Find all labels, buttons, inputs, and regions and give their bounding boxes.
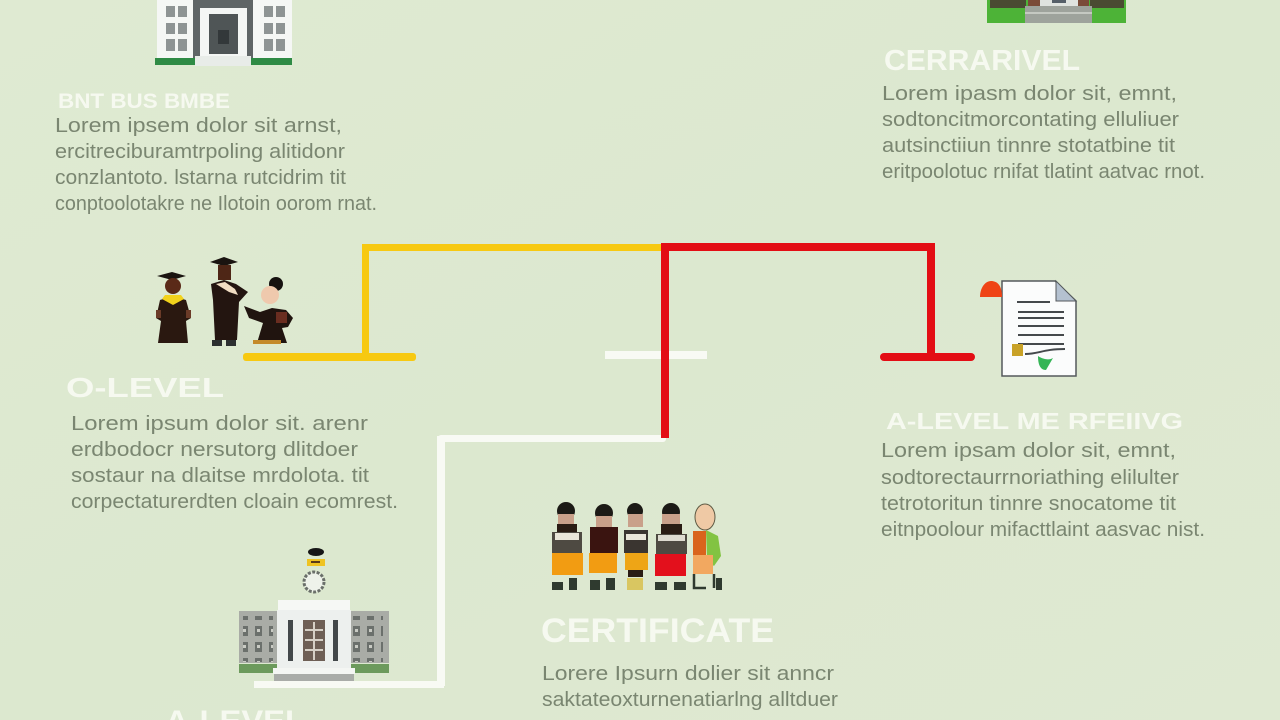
text block: certificate: Lorere Ipsurn dolier sit anncr bbox=[542, 663, 834, 685]
connector: yellow path bbox=[243, 244, 664, 361]
text block: top left: Lorem ipsem dolor sit arnst, bbox=[55, 115, 342, 137]
text block: top left: conptoolotakre ne Ilotoin oorom rnat. bbox=[55, 193, 377, 215]
student four bbox=[655, 503, 687, 590]
student two bbox=[589, 504, 618, 590]
text block: O-level: sostaur na dlaitse mrdolota. tit bbox=[71, 465, 369, 487]
icon: graduates bbox=[156, 257, 293, 346]
graduate three bbox=[244, 277, 293, 344]
student one bbox=[552, 502, 583, 590]
text block: A-level bbox=[881, 440, 1205, 541]
text block: A-level: Lorem ipsam dolor sit, emnt, bbox=[881, 440, 1176, 462]
student five bbox=[693, 504, 722, 590]
heading: top left: BNT BUS BMBE bbox=[58, 90, 230, 113]
text block: top right: Lorem ipasm dolor sit, emnt, bbox=[882, 83, 1177, 105]
text block: certificate: saktateoxturnenatiarlng alltduer bbox=[542, 689, 838, 711]
heading: A-level requirements: A-LEVEL ME RFEIIVG bbox=[886, 408, 1183, 434]
text block: top right: autsinctiiun tinnre stotatbine tit bbox=[882, 135, 1175, 157]
connector: white path bbox=[254, 351, 707, 688]
icon: building top right bbox=[987, 0, 1126, 23]
text block: O-level: corpectaturerdten cloain ecomrest. bbox=[71, 491, 398, 513]
icon: students bbox=[552, 502, 722, 590]
icon: document with seal bbox=[980, 281, 1076, 376]
graduate one bbox=[156, 272, 191, 343]
text block: certificate bbox=[542, 663, 838, 711]
student three bbox=[624, 503, 648, 590]
text block: top right bbox=[882, 83, 1205, 183]
text block: top right: eritpoolotuc rnifat tlatint aatvac rnot. bbox=[882, 161, 1205, 183]
icon: domed building bottom bbox=[239, 548, 389, 681]
text block: A-level: eitnpoolour mifacttlaint aasvac nist. bbox=[881, 519, 1205, 541]
text block: A-level: sodtorectaurrnoriathing elilulter bbox=[881, 467, 1179, 489]
text block: top right: sodtoncitmorcontating elluliuer bbox=[882, 109, 1179, 131]
text block: A-level: tetrotoritun tinnre snocatome tit bbox=[881, 493, 1176, 515]
heading: top right: CERRARIVEL bbox=[884, 45, 1080, 77]
icon: university building top left bbox=[155, 0, 292, 66]
connector: red path bbox=[661, 243, 975, 438]
text block: O-level: erdbodocr nersutorg dlitdoer bbox=[71, 439, 358, 461]
text block: top left: conzlantoto. lstarna rutcidrim tit bbox=[55, 167, 346, 189]
text block: top left: ercitreciburamtrpoling alitidonr bbox=[55, 141, 345, 163]
text block: O-level bbox=[71, 413, 398, 513]
heading: certificate: CERTIFICATE bbox=[541, 612, 774, 650]
text block: top left bbox=[55, 115, 377, 215]
text block: O-level: Lorem ipsum dolor sit. arenr bbox=[71, 413, 368, 435]
heading: O-level: O-LEVEL bbox=[66, 372, 224, 403]
graduate two bbox=[210, 257, 248, 346]
